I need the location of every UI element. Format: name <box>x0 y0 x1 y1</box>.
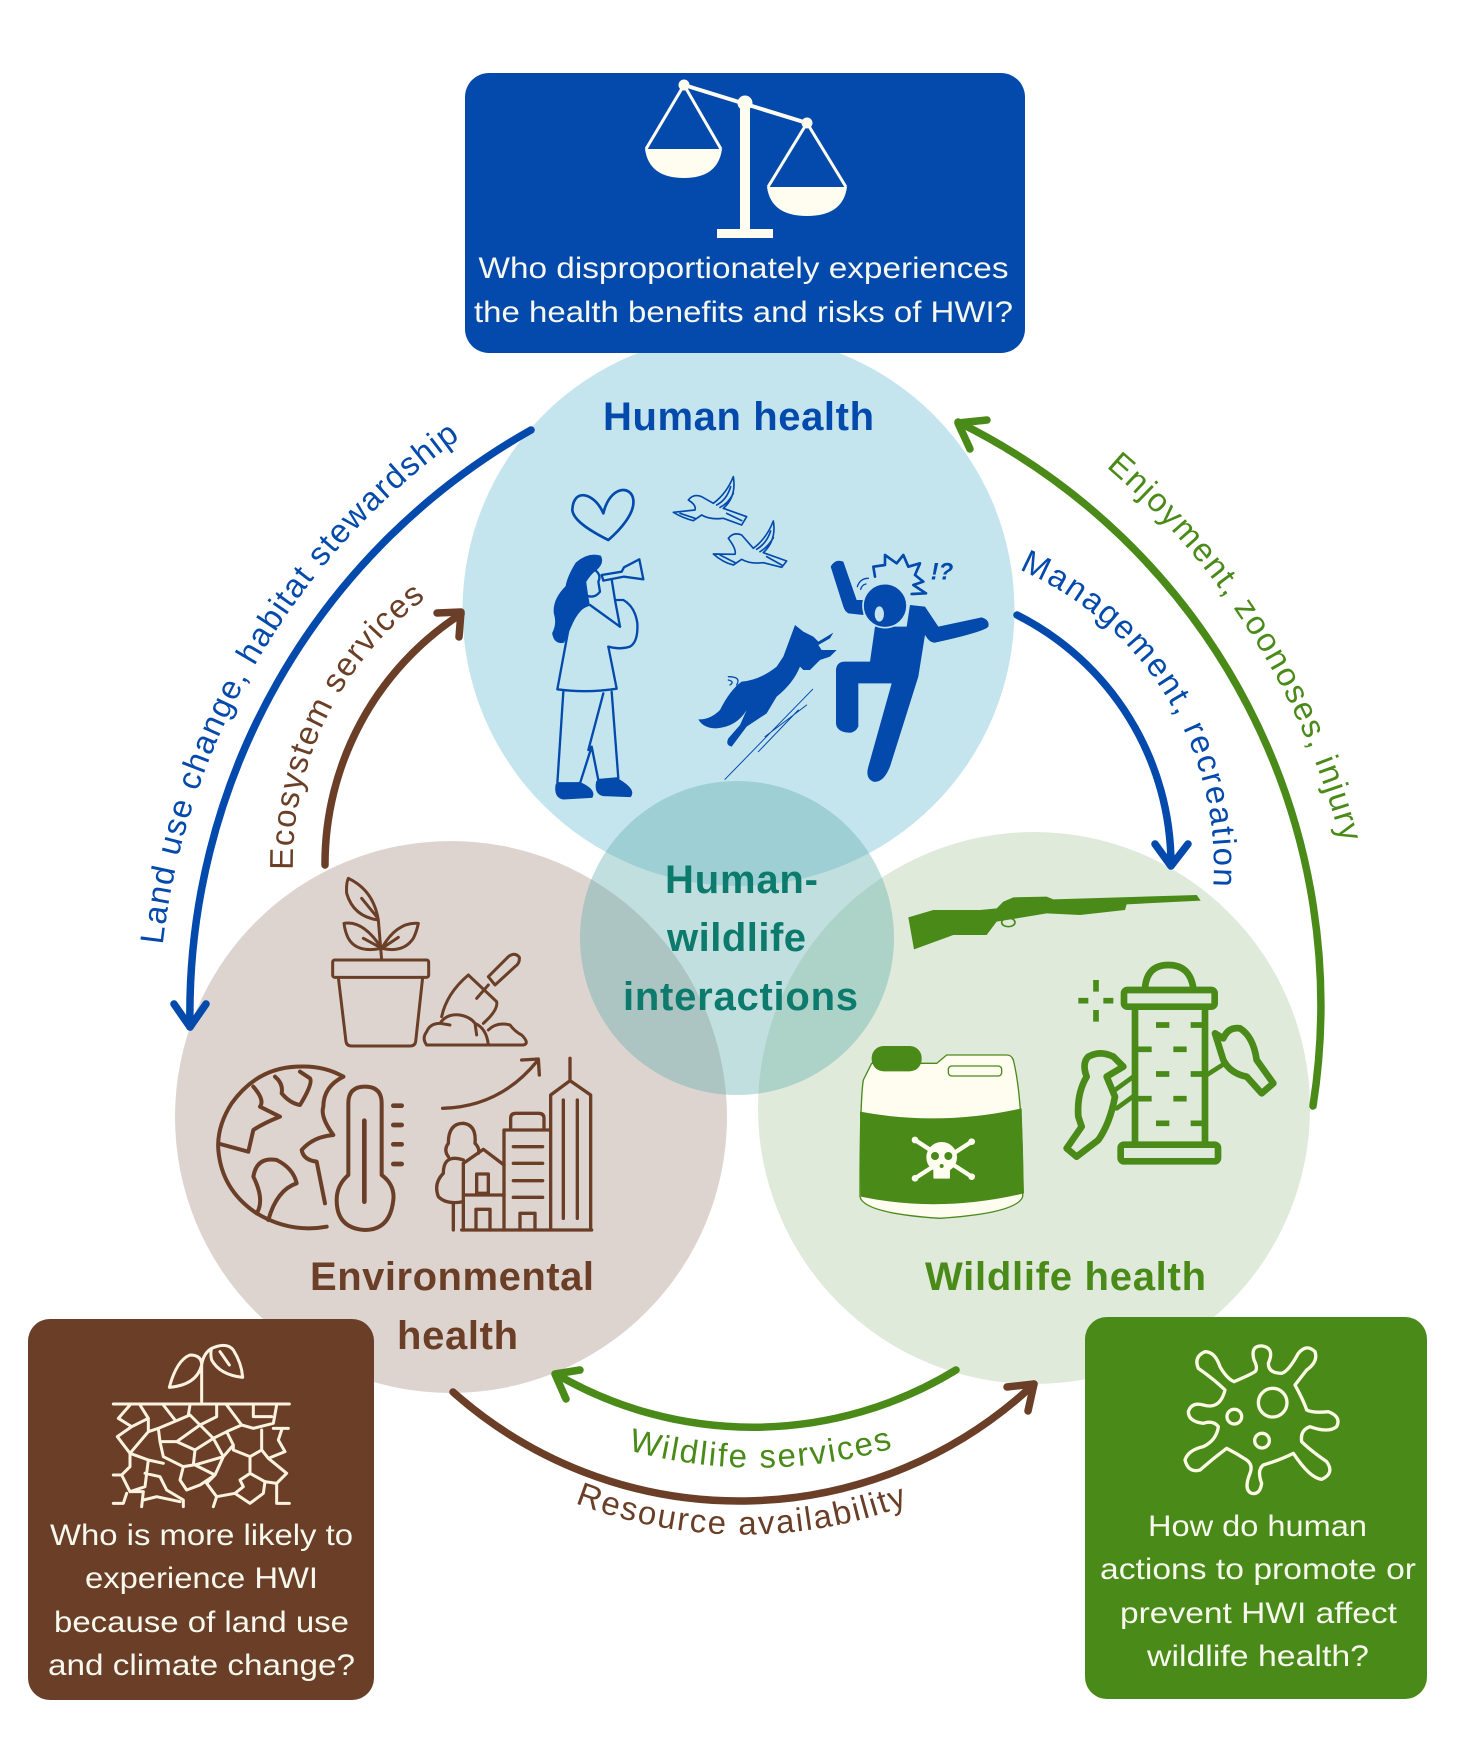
arrow: land use change <box>174 430 531 1027</box>
icon: bird feeder <box>1067 965 1273 1161</box>
text: wildlife health question: prevent HWI affect <box>1120 1597 1398 1630</box>
icon: trowel and soil <box>424 954 526 1045</box>
text: environmental health question: because of land use <box>54 1606 349 1639</box>
arrow: enjoyment <box>958 420 1321 1106</box>
arrow: ecosystem services <box>325 612 461 865</box>
heading: environmental health: Environmental <box>310 1255 594 1299</box>
text: wildlife health question <box>1100 1510 1416 1673</box>
text: environmental health question: and climate change? <box>48 1649 355 1682</box>
heading: environmental health <box>310 1255 594 1358</box>
panel: environmental health question <box>28 1319 374 1700</box>
label: land use change: Land use change, habitat stewardship <box>140 427 457 942</box>
icon: leaping fox <box>698 625 837 779</box>
text: human health question: Who disproportionately experiences <box>478 252 1008 285</box>
label: resource availability: Resource availability <box>578 1482 902 1535</box>
label: management, recreation: Management, recreation <box>1022 550 1237 885</box>
label: enjoyment, zoonoses, injury: Enjoyment, zoonoses, injury <box>1108 452 1358 838</box>
panel: wildlife health question <box>1085 1317 1427 1699</box>
icon: globe and thermometer <box>218 1066 402 1230</box>
text: wildlife health question: How do human <box>1148 1510 1367 1543</box>
illustration: environmental health icons <box>218 878 592 1230</box>
circle: wildlife health <box>758 832 1310 1384</box>
icon: virus <box>1185 1346 1338 1494</box>
icon: potted plant <box>333 878 429 1046</box>
text: environmental health question <box>48 1519 355 1682</box>
label: wildlife services: Wildlife services <box>633 1428 890 1468</box>
heading: human-wildlife interactions: wildlife <box>666 916 806 960</box>
text: environmental health question: experience HWI <box>85 1562 318 1595</box>
heading: human-wildlife interactions: interactions <box>623 975 858 1019</box>
arrow: wildlife services <box>555 1370 956 1427</box>
circle: human health <box>462 334 1014 886</box>
heading: wildlife health: Wildlife health <box>925 1255 1206 1299</box>
panel: human health question <box>465 73 1025 353</box>
icon: rifle <box>908 895 1201 949</box>
text: wildlife health question: actions to promote or <box>1100 1553 1416 1586</box>
text: human health question <box>474 252 1013 329</box>
icon: startled person: !? <box>931 558 954 585</box>
heading: human-wildlife interactions: Human- <box>665 858 818 902</box>
heading: environmental health: health <box>397 1314 518 1358</box>
illustration: wildlife health icons <box>860 895 1273 1218</box>
text: human health question: the health benefits and risks of HWI? <box>474 296 1013 329</box>
heading: human health: Human health <box>603 395 874 439</box>
icon: poison jug <box>860 1046 1024 1218</box>
circle: human-wildlife interactions overlap <box>580 781 894 1095</box>
heading: human-wildlife interactions <box>623 858 858 1019</box>
icon: balance scale <box>645 80 847 238</box>
icon: city growth <box>437 1058 592 1230</box>
arrow: management <box>1017 615 1188 866</box>
label: ecosystem services: Ecosystem services <box>270 587 423 868</box>
illustration: human health scene <box>553 477 989 798</box>
text: environmental health question: Who is more likely to <box>50 1519 353 1552</box>
icon: startled person <box>831 555 989 782</box>
arrow: resource availability <box>453 1384 1034 1501</box>
icon: birds <box>673 477 787 567</box>
circle: environmental health <box>175 841 727 1393</box>
text: wildlife health question: wildlife health? <box>1146 1640 1369 1673</box>
icon: heart <box>572 490 633 540</box>
icon: sprout over cracked soil <box>113 1345 289 1507</box>
icon: woman with binoculars <box>553 556 643 798</box>
